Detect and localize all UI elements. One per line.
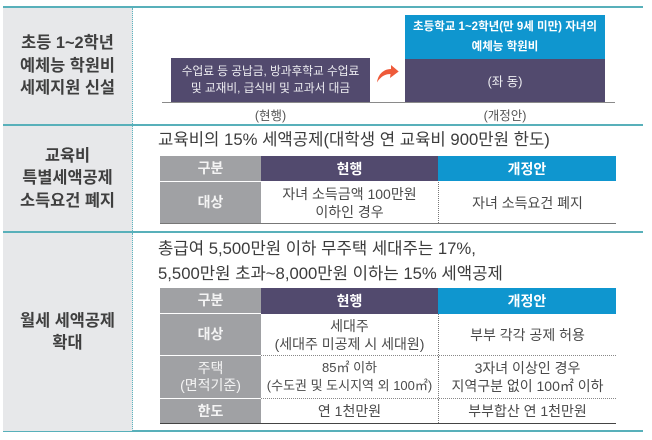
header: revised — [438, 288, 616, 314]
heading: monthly rent tax credit: 확대 — [52, 334, 83, 352]
cell: current limit: 연 1천만원 — [318, 403, 381, 419]
row label: target — [160, 314, 261, 355]
header: category: 구분 — [198, 292, 223, 308]
header: revised: 개정안 — [508, 293, 546, 309]
text: rent credit summary: 총급여 5,500만원 이하 무주택 세대주는 17%, — [158, 239, 476, 258]
header: category: 구분 — [198, 160, 223, 176]
panel: revised blue box: 예체능 학원비 — [472, 41, 538, 53]
heading: education expense income requirement: 소득요건 폐지 — [20, 192, 115, 210]
header: current: 현행 — [337, 160, 362, 176]
row label: limit: 한도 — [198, 402, 223, 418]
cell: current target: 자녀 소득금액 100만원 — [282, 186, 417, 202]
header: current — [261, 288, 438, 314]
heading: education expense income requirement: 교육비 — [45, 147, 90, 165]
panel: current box — [171, 58, 370, 102]
cell: revised housing — [438, 356, 616, 398]
text: education credit summary: 교육비의 15% 세액공제(대학생 연 교육비 900만원 한도) — [158, 130, 550, 149]
cell: current target — [275, 318, 424, 352]
text: rent credit summary — [158, 239, 503, 283]
icon: orange arrow — [377, 65, 399, 82]
cell: revised housing: 3자녀 이상인 경우 — [475, 360, 580, 376]
header: current — [261, 156, 438, 181]
cell: current housing — [267, 360, 432, 393]
row label: housing: (면적기준) — [180, 377, 241, 393]
cell: revised target — [438, 314, 616, 355]
cell: revised limit — [438, 399, 616, 423]
heading: education expense income requirement — [3, 126, 133, 231]
heading: monthly rent tax credit: 월세 세액공제 — [20, 312, 115, 330]
row label: target: 대상 — [198, 194, 223, 210]
cell: current housing: 85㎡ 이하 — [322, 360, 377, 375]
heading: monthly rent tax credit — [3, 233, 133, 431]
label: current: (현행) — [255, 108, 286, 122]
cell: revised target — [438, 182, 616, 223]
row label: housing: 주택 — [198, 360, 223, 376]
label: revised: (개정안) — [484, 108, 526, 122]
heading: elementary arts academy tax credit — [3, 8, 133, 124]
panel: current box: 및 교재비, 급식비 및 교과서 대금 — [191, 82, 350, 95]
row label: target — [160, 182, 261, 223]
cell: current target: 이하인 경우 — [315, 204, 384, 220]
panel: revised purple box: (좌 동) — [488, 75, 522, 89]
header: revised — [438, 156, 616, 181]
header: current: 현행 — [337, 293, 362, 309]
table: education credit — [160, 156, 616, 224]
heading: education expense income requirement: 특별세액공제 — [22, 169, 113, 187]
header: category — [160, 288, 261, 313]
row label: limit — [160, 399, 261, 423]
table: rent credit — [160, 288, 616, 424]
cell: revised limit: 부부합산 연 1천만원 — [468, 403, 587, 419]
header: revised: 개정안 — [508, 160, 546, 176]
baseline — [162, 102, 615, 103]
panel: revised blue box: 초등학교 1~2학년(만 9세 미만) 자녀의 — [413, 21, 597, 33]
cell: revised target: 부부 각각 공제 허용 — [470, 326, 585, 342]
heading: elementary arts academy tax credit: 세제지원 신설 — [20, 79, 115, 97]
cell: current housing: (수도권 및 도시지역 외 100㎡) — [267, 378, 432, 393]
panel: current box: 수업료 등 공납금, 방과후학교 수업료 — [182, 65, 359, 78]
heading: elementary arts academy tax credit: 예체능 학원비 — [20, 57, 115, 75]
text: rent credit summary: 5,500만원 초과~8,000만원 이하는 15% 세액공제 — [158, 264, 503, 283]
header: category — [160, 156, 261, 181]
panel: revised blue box — [405, 15, 605, 59]
cell: current target: 세대주 — [330, 318, 369, 334]
row label: target: 대상 — [198, 326, 223, 342]
row label: housing — [160, 356, 261, 398]
panel: revised purple box — [405, 59, 605, 102]
heading: elementary arts academy tax credit: 초등 1~2학년 — [21, 34, 114, 52]
cell: revised housing: 지역구분 없이 100㎡ 이하 — [451, 378, 604, 394]
cell: revised target: 자녀 소득요건 폐지 — [472, 194, 583, 210]
cell: current target: (세대주 미공제 시 세대원) — [275, 336, 424, 352]
cell: current target — [282, 186, 417, 220]
